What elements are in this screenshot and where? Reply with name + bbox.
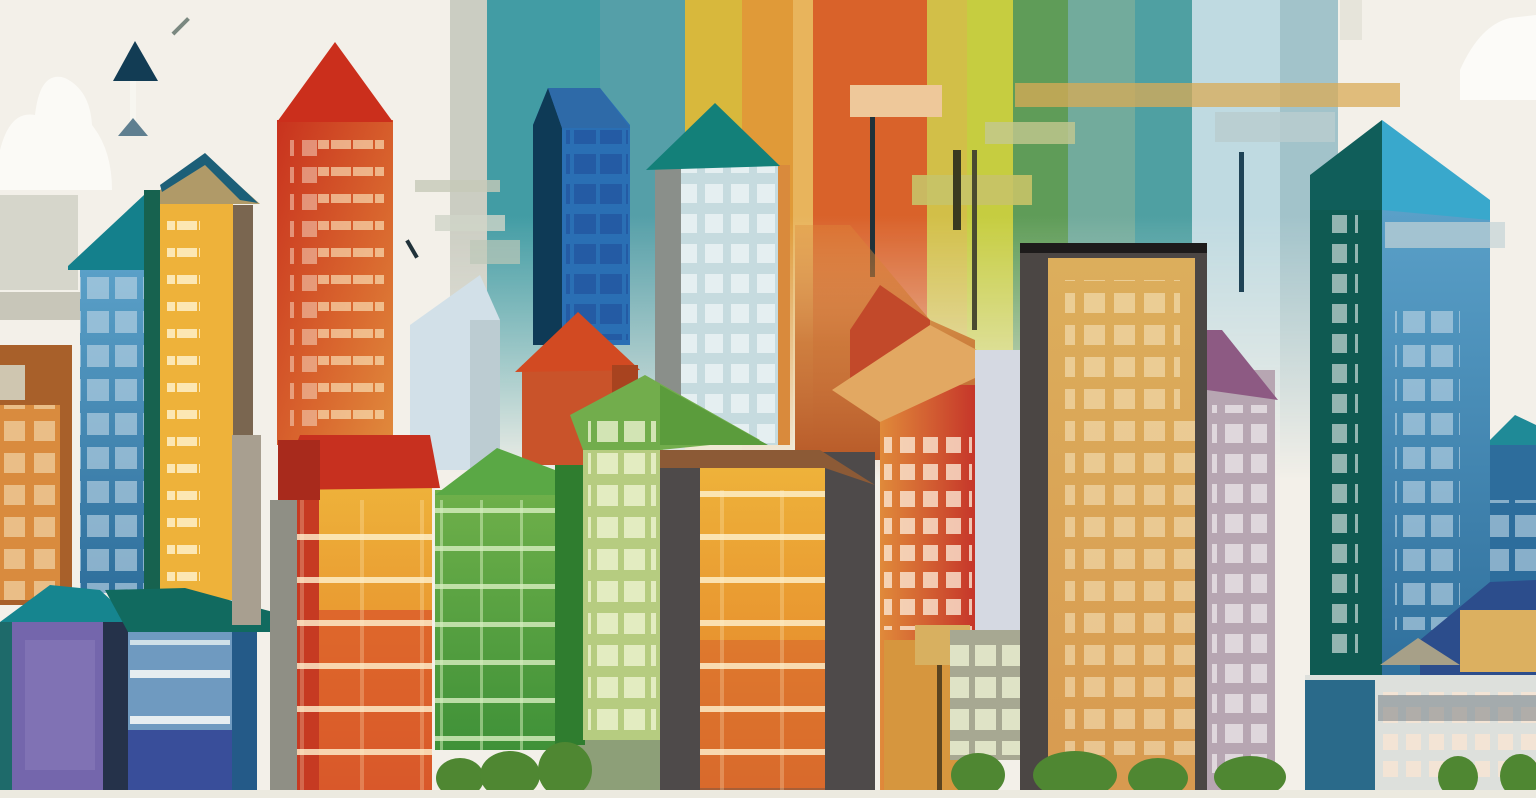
far-left brown building — [0, 345, 72, 605]
rust building behind orange-red block — [795, 225, 975, 460]
colour stripes — [450, 0, 1338, 480]
bottom-right white building with dome — [1305, 580, 1536, 790]
purple building — [1207, 330, 1278, 790]
ground line — [0, 790, 1536, 798]
icon: small arrow marker — [113, 17, 419, 259]
clouds — [0, 0, 1536, 320]
blue glass tower — [533, 88, 630, 345]
red tower — [277, 42, 393, 445]
bottom-left blue building — [105, 588, 273, 790]
orange central building — [660, 450, 875, 790]
orange house — [515, 312, 640, 465]
pale distant building — [410, 180, 520, 470]
light-green building — [555, 375, 768, 745]
light glass tower with teal roof — [646, 103, 790, 445]
red-orange building — [278, 435, 440, 790]
grey column — [270, 500, 297, 790]
right-edge blue buildings — [1490, 415, 1536, 590]
bushes — [436, 742, 1536, 798]
tan tall tower — [1020, 243, 1207, 790]
low base under light-green building — [555, 740, 660, 790]
grey-white low building — [950, 350, 1020, 760]
green building — [435, 448, 555, 750]
bottom-left purple building — [0, 585, 135, 790]
teal glass tower — [1310, 120, 1505, 680]
teal-roof blue building — [68, 190, 162, 593]
signs and poles — [850, 83, 1400, 330]
orange-red house tower — [832, 325, 1005, 790]
grey side tower — [232, 435, 261, 625]
yellow tower — [160, 153, 260, 600]
